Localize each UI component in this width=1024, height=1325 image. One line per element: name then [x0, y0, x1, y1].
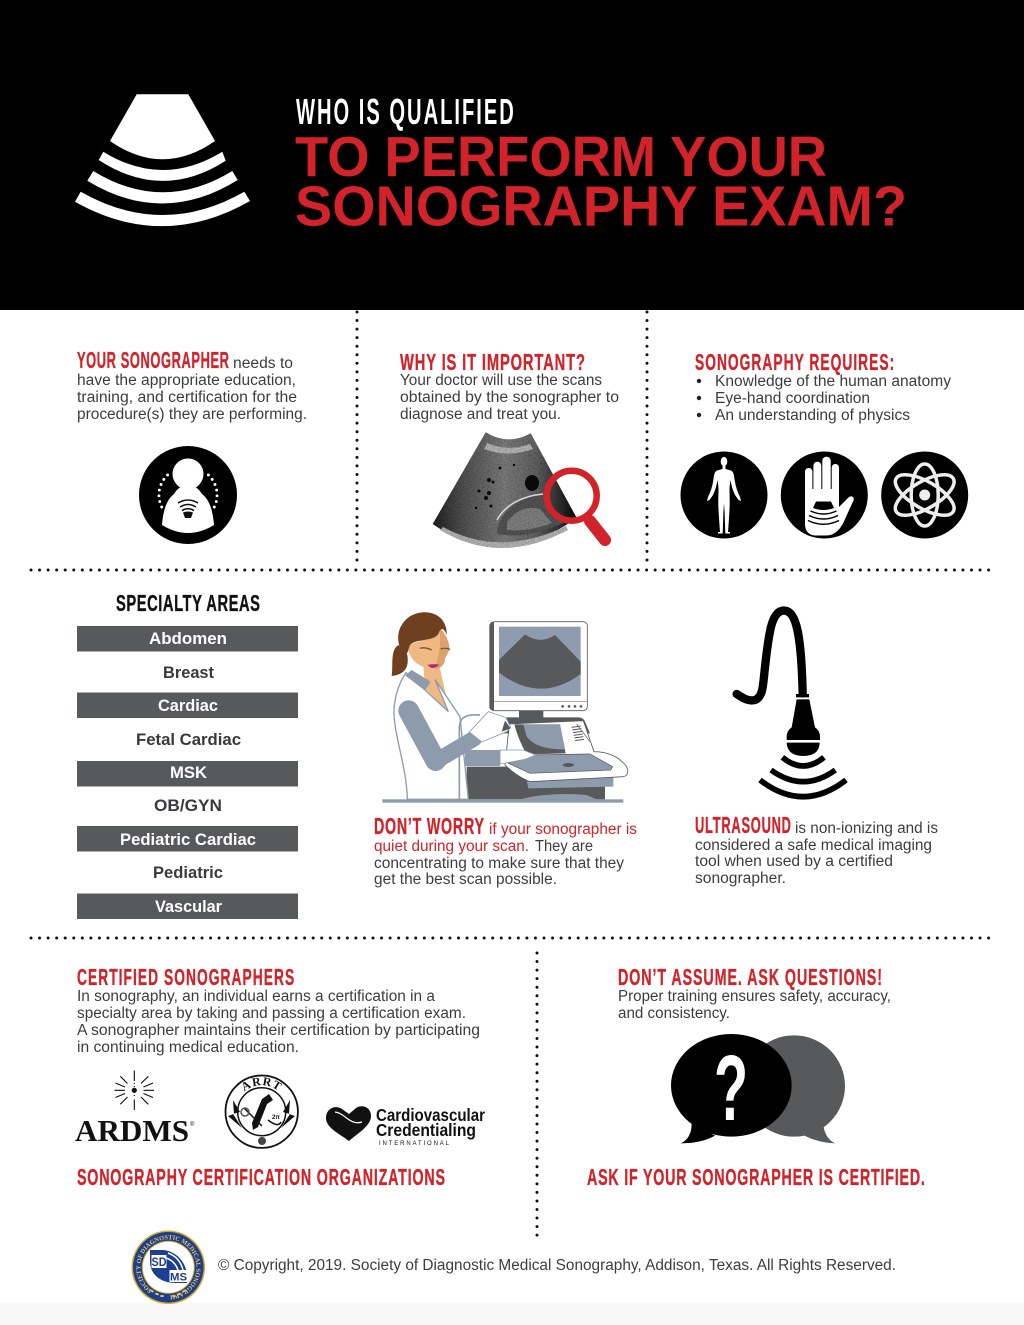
row: Abdomen: Abdomen: [149, 630, 227, 648]
text block: why is it important: obtained by the sonographer to: [400, 389, 619, 406]
text block: certified sonographers: A sonographer maintains their certification by participating: [77, 1022, 480, 1039]
footer band: [0, 1303, 1024, 1325]
logo: SDMS seal: SD: [152, 1257, 166, 1269]
icon: atom: [881, 452, 968, 538]
panel: specialty areas: [77, 592, 298, 919]
text block: why is it important: diagnose and treat you.: [400, 406, 561, 423]
logo: Cardiovascular Credentialing: Cardiovascular: [376, 1105, 485, 1125]
title: TO PERFORM YOUR: [295, 125, 827, 189]
logo: Cardiovascular Credentialing: Credentialing: [376, 1120, 476, 1140]
icon: hand with ultrasound: [781, 452, 868, 538]
logo: SDMS seal: [132, 1230, 206, 1304]
text block: ultrasound: considered a safe medical imaging: [695, 837, 932, 854]
text block: certified sonographers: in continuing medical education.: [77, 1039, 299, 1056]
text block: ultrasound: is non-ionizing and is: [795, 820, 938, 837]
text block: your sonographer: training, and certification for the: [77, 389, 297, 406]
logo: ARRT: ARRT: [243, 1077, 282, 1092]
row: Vascular: Vascular: [155, 898, 223, 916]
icon: ultrasound probe: [737, 611, 846, 797]
row: Vascular: [77, 894, 298, 919]
text block: why is it important: [400, 351, 619, 423]
text block: don't worry: DON’T WORRY: [374, 815, 484, 840]
text block: don't assume: DON’T ASSUME. ASK QUESTIONS!: [618, 966, 882, 991]
header panel: [0, 0, 1024, 310]
row: Abdomen: [77, 626, 298, 652]
text block: don't assume: and consistency.: [618, 1005, 730, 1022]
panel: your sonographer: [77, 347, 307, 544]
logo: ARRT: 2π: [272, 1115, 280, 1121]
text block: sonography requires: Eye-hand coordination: [715, 390, 870, 407]
row: Pediatric Cardiac: [77, 826, 298, 852]
text block: certified sonographers: [77, 966, 480, 1056]
text block: don't assume: [618, 966, 891, 1022]
text block: ultrasound: [695, 812, 938, 887]
panel: certified sonographers: [75, 966, 485, 1191]
text block: why is it important: WHY IS IT IMPORTANT?: [400, 351, 585, 376]
row: Cardiac: Cardiac: [158, 697, 218, 715]
logo: Cardiovascular Credentialing: [326, 1105, 485, 1147]
icon: speech bubbles with question mark: ?: [714, 1038, 748, 1141]
logo: Cardiovascular Credentialing: INTERNATIONAL: [379, 1141, 450, 1147]
row: Fetal Cardiac: Fetal Cardiac: [136, 731, 241, 749]
panel: don't assume: [587, 966, 925, 1191]
text block: don't assume: Proper training ensures safety, accuracy,: [618, 988, 891, 1005]
image: ultrasound scan with magnifier: [433, 432, 605, 548]
text block: certified sonographers: CERTIFIED SONOGRAPHERS: [77, 966, 294, 991]
logo: SDMS seal: MS: [170, 1272, 187, 1284]
caption: certification organizations: SONOGRAPHY CERTIFICATION ORGANIZATIONS: [77, 1166, 445, 1191]
row: Pediatric: Pediatric: [153, 864, 223, 882]
logo: ARRT: [224, 1074, 299, 1149]
text block: don't worry: if your sonographer is: [489, 821, 637, 838]
icon: human body: [680, 452, 768, 538]
text block: don't worry: get the best scan possible.: [374, 871, 557, 888]
row: Cardiac: [77, 692, 298, 718]
text block: ultrasound: tool when used by a certified: [695, 853, 893, 870]
text block: your sonographer: needs to: [233, 355, 293, 372]
text block: your sonographer: [77, 347, 307, 423]
logo: SDMS seal: SOCIETY OF DIAGNOSTIC MEDICAL SONOGRAPHY: [136, 1235, 200, 1300]
row: Breast: Breast: [163, 664, 214, 682]
title: [295, 93, 907, 238]
text block: your sonographer: YOUR SONOGRAPHER: [77, 347, 229, 373]
text block: sonography requires: Knowledge of the human anatomy: [715, 373, 951, 390]
icon: speech bubbles with question mark: [671, 1034, 845, 1143]
row: Pediatric Cardiac: Pediatric Cardiac: [120, 831, 256, 849]
logo: ARDMS: [75, 1070, 195, 1148]
text block: ultrasound: sonographer.: [695, 870, 786, 887]
text block: don't worry: They are: [535, 838, 593, 855]
text block: don't worry: quiet during your scan.: [374, 838, 529, 855]
caption: ask if certified: ASK IF YOUR SONOGRAPHER IS CERTIFIED.: [587, 1166, 925, 1191]
logo: ARDMS: ®: [190, 1121, 195, 1128]
text block: why is it important: Your doctor will use the scans: [400, 372, 602, 389]
title: SONOGRAPHY EXAM?: [295, 174, 907, 238]
text block: don't worry: concentrating to make sure that they: [374, 855, 624, 872]
row: MSK: [77, 761, 298, 786]
copyright: © Copyright, 2019. Society of Diagnostic Medical Sonography, Addison, Texas. All Rights Reserved.: [218, 1257, 896, 1274]
title: WHO IS QUALIFIED: [296, 93, 514, 133]
panel: sonography requires: [680, 351, 968, 538]
text block: your sonographer: procedure(s) they are performing.: [77, 406, 307, 423]
text block: certified sonographers: In sonography, an individual earns a certification in a: [77, 988, 435, 1005]
row: OB/GYN: OB/GYN: [154, 797, 222, 815]
logo: ARDMS: ARDMS: [75, 1113, 189, 1148]
row: MSK: MSK: [170, 764, 207, 782]
text block: sonography requires: [695, 351, 951, 424]
text block: certified sonographers: specialty area by taking and passing a certification exam.: [77, 1005, 466, 1022]
text block: sonography requires: SONOGRAPHY REQUIRES:: [695, 351, 894, 376]
text block: don't worry: [374, 815, 637, 888]
icon: sonographer person: [139, 446, 237, 544]
text block: ultrasound: ULTRASOUND: [695, 812, 791, 838]
illustration: sonographer at ultrasound machine: [382, 612, 628, 803]
text block: your sonographer: have the appropriate education,: [77, 372, 296, 389]
panel: why is it important: [400, 351, 619, 548]
text block: sonography requires: An understanding of physics: [715, 407, 910, 424]
heading: specialty areas: SPECIALTY AREAS: [116, 592, 260, 617]
icon: ultrasound sector: [75, 94, 250, 226]
